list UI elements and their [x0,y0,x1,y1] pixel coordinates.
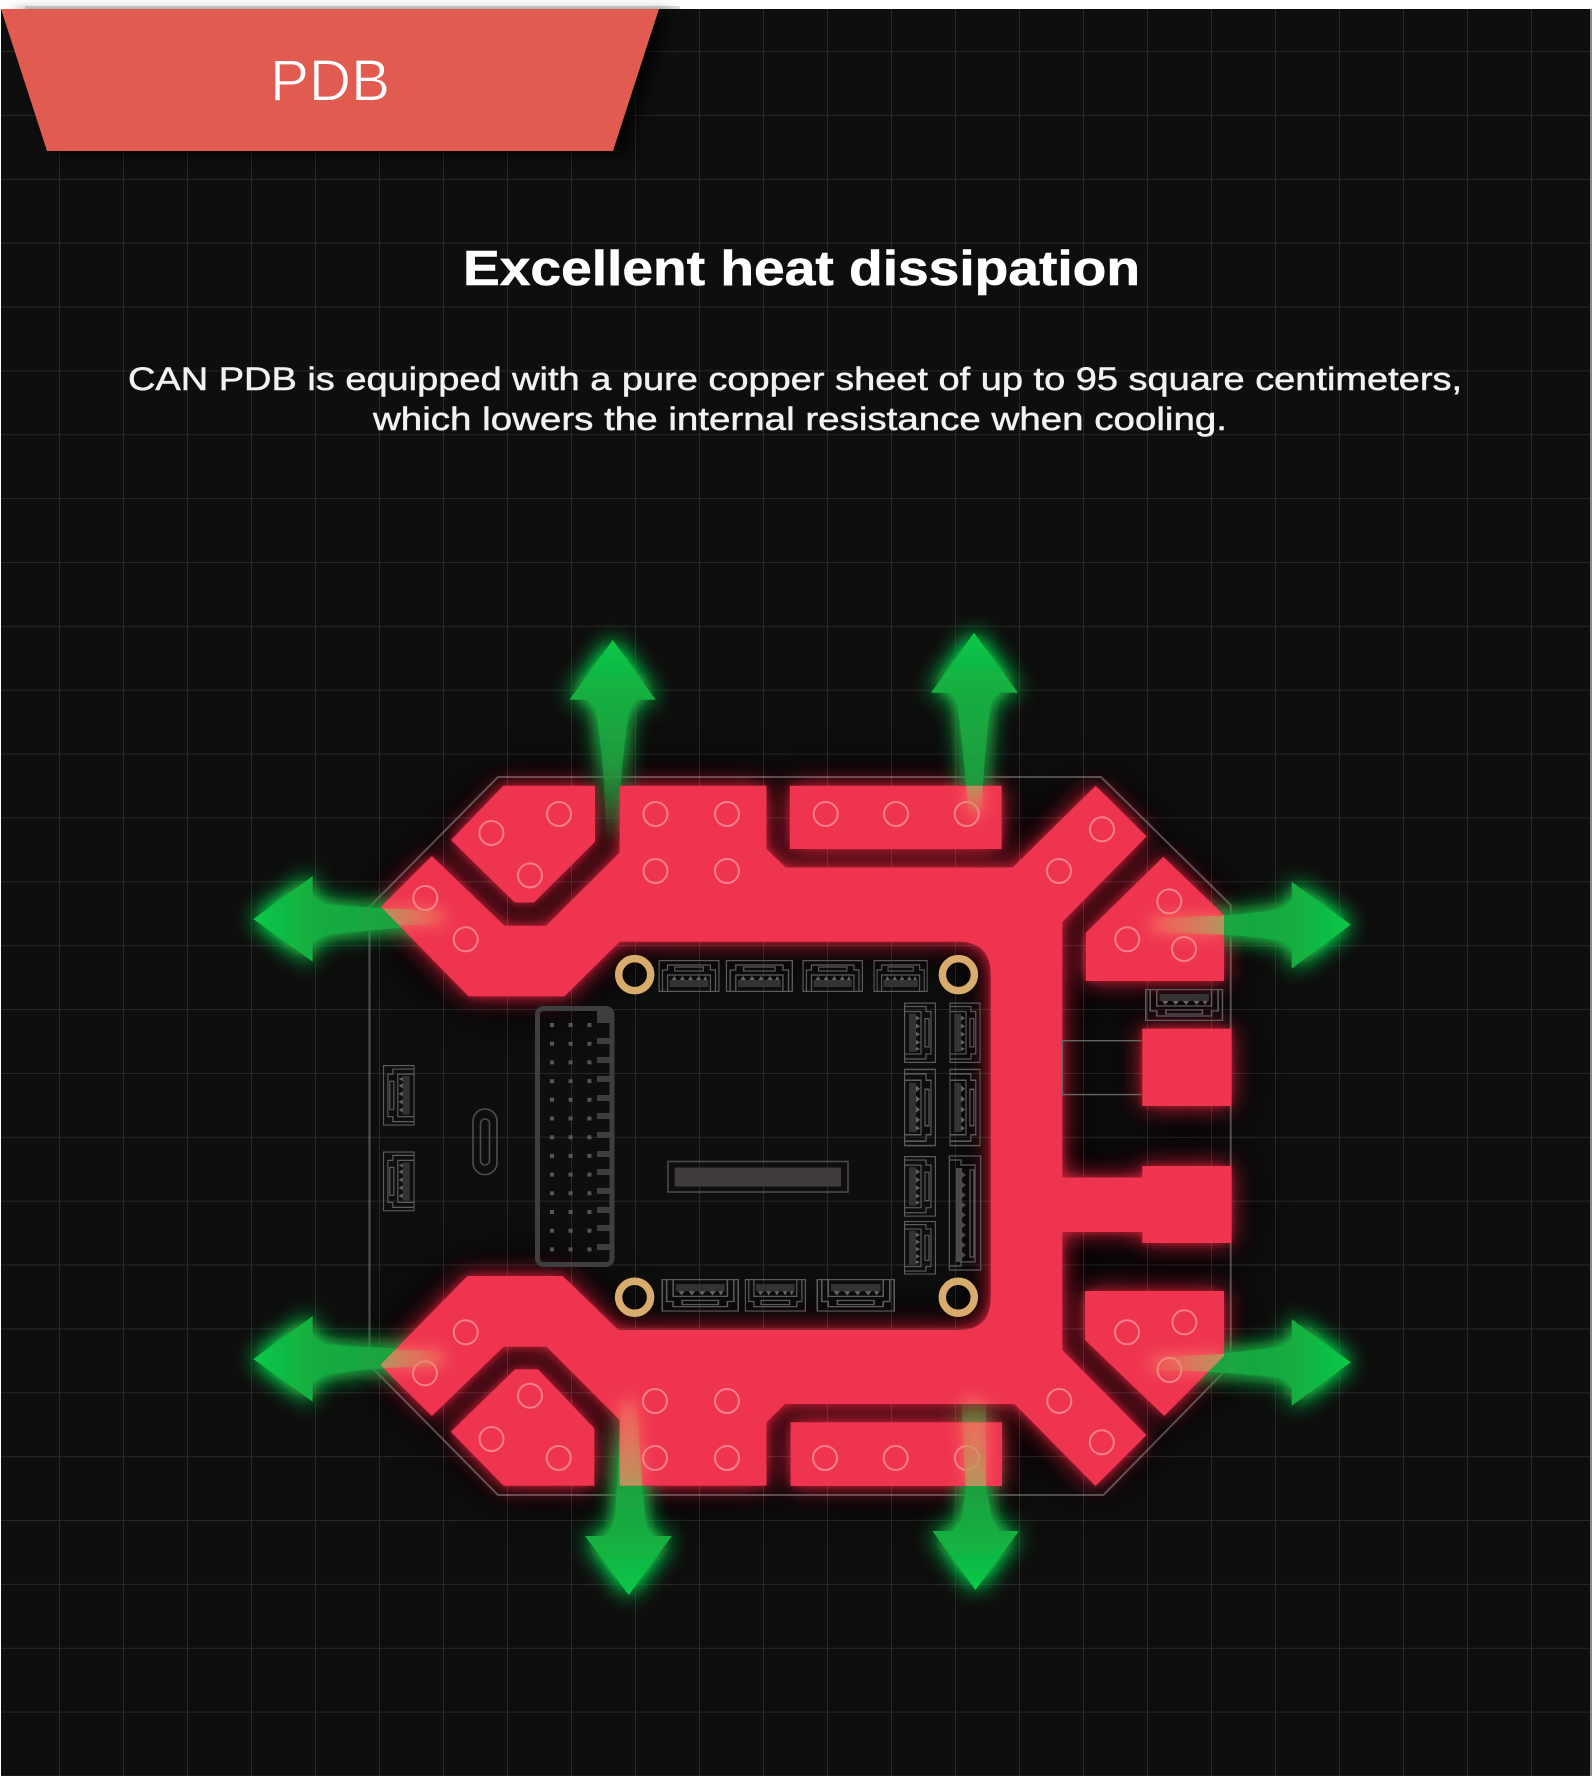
copper wide red glow [380,786,1231,1486]
description text: which lowers the internal resistance when cooling. [372,401,1227,437]
copper shadow [380,786,1231,1486]
banner shadow [14,13,671,155]
pin header [538,1008,612,1264]
FPC slot [668,1162,848,1192]
left connectors [383,1066,414,1211]
arrow: right upper [1150,882,1351,969]
arrow: right lower [1150,1319,1351,1406]
top connectors [659,961,927,991]
copper edge red glow [380,786,1231,1486]
arrow: bottom right [932,1396,1019,1590]
arrow: bottom left [585,1400,672,1595]
right column connectors [905,1003,981,1274]
arrow: left lower [253,1316,445,1402]
mounting rings [619,959,974,1313]
arrow: top left [569,640,656,842]
right side connector [1146,990,1223,1020]
copper via holes [413,802,1196,1470]
arrow: top right [931,633,1018,816]
bottom connectors [662,1280,894,1311]
description text [128,361,1462,437]
copper sheet [380,786,1231,1486]
description text: CAN PDB is equipped with a pure copper sheet of up to 95 square centimeters, [128,361,1462,397]
trace lines [1062,1041,1142,1095]
PCB board diagram [370,777,1231,1495]
banner label: PDB [270,48,390,114]
banner: PDB [1,9,659,151]
USB-C port [473,1109,497,1175]
arrow: left upper [253,876,445,962]
board outline [370,777,1231,1495]
heading: Excellent heat dissipation [463,242,1140,296]
